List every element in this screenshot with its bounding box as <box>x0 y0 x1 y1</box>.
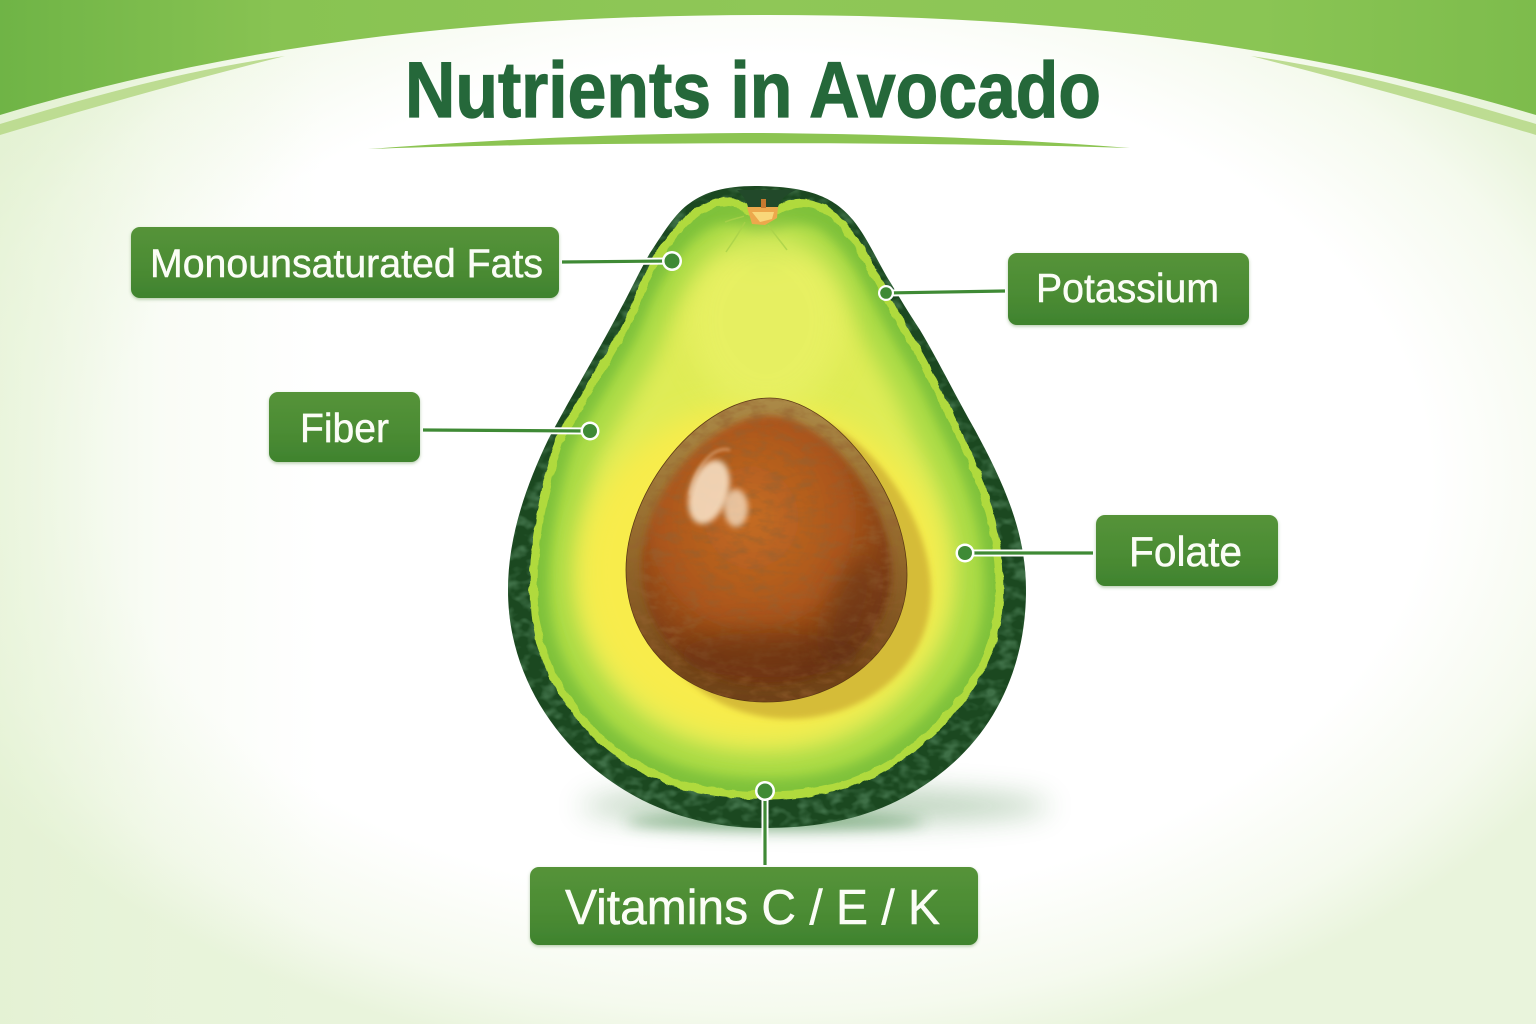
label: Vitamins C / E / K: Vitamins C / E / K <box>565 881 940 935</box>
avocado pit <box>620 390 915 710</box>
pit shadow <box>650 415 931 719</box>
label: Monounsaturated Fats: Monounsaturated Fats <box>150 242 543 286</box>
connector: Monounsaturated Fats <box>562 251 682 271</box>
label: Folate <box>1096 515 1278 586</box>
avocado flesh <box>534 202 999 796</box>
connector: Potassium <box>878 285 1005 301</box>
label: Folate: Folate <box>1129 528 1242 575</box>
connector: Fiber <box>423 422 600 440</box>
connector: Folate <box>956 544 1093 562</box>
header band <box>0 0 1536 135</box>
title: Nutrients in Avocado <box>405 45 1101 134</box>
label: Potassium: Potassium <box>1036 265 1219 311</box>
avocado ground shadow <box>580 789 1050 830</box>
label: Fiber: Fiber <box>300 405 389 451</box>
label: Monounsaturated Fats <box>131 227 559 298</box>
title underline <box>368 133 1130 149</box>
avocado stem <box>737 190 796 225</box>
avocado skin <box>508 186 1026 828</box>
avocado illustration <box>508 186 1026 828</box>
label: Fiber <box>269 392 420 462</box>
connector: Vitamins <box>755 781 775 865</box>
label: Vitamins C / E / K <box>530 867 978 945</box>
label: Potassium <box>1008 253 1249 325</box>
